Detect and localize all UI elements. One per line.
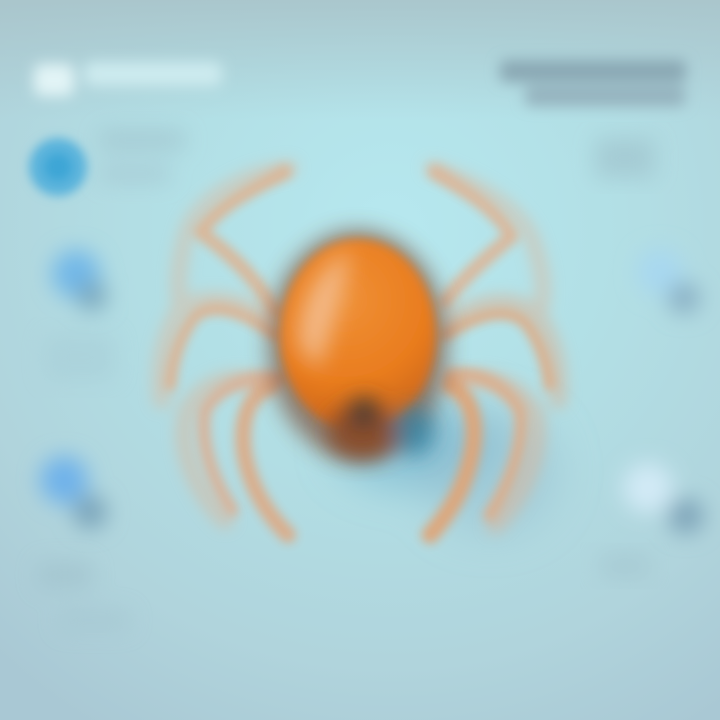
icon: blue circle, upper left [29,138,87,196]
soft shadow under tick [335,400,560,535]
inner strands, left [170,172,288,535]
heading: blurred title, left [34,62,222,96]
text block: middle left [45,335,115,380]
text block: lower left [38,562,130,630]
tick legs, right side [430,168,558,535]
text block: upper left [100,130,185,183]
tick head [328,398,435,458]
body highlight [298,250,350,370]
icon: blue blob, lower left [40,456,107,529]
text block: lower right [600,553,650,579]
text block: upper right [595,138,655,178]
outer ghost strands, left [161,168,290,520]
heading: blurred title, right [500,60,686,106]
tick legs, left side [161,168,290,535]
icon: pale blob, middle right [637,249,700,314]
tick body [268,230,448,460]
outer ghost strands, right [432,168,558,525]
icon: blue blob, middle left [52,250,107,311]
inner strands, right [430,172,550,535]
icon: pale blob, lower right [623,463,704,534]
